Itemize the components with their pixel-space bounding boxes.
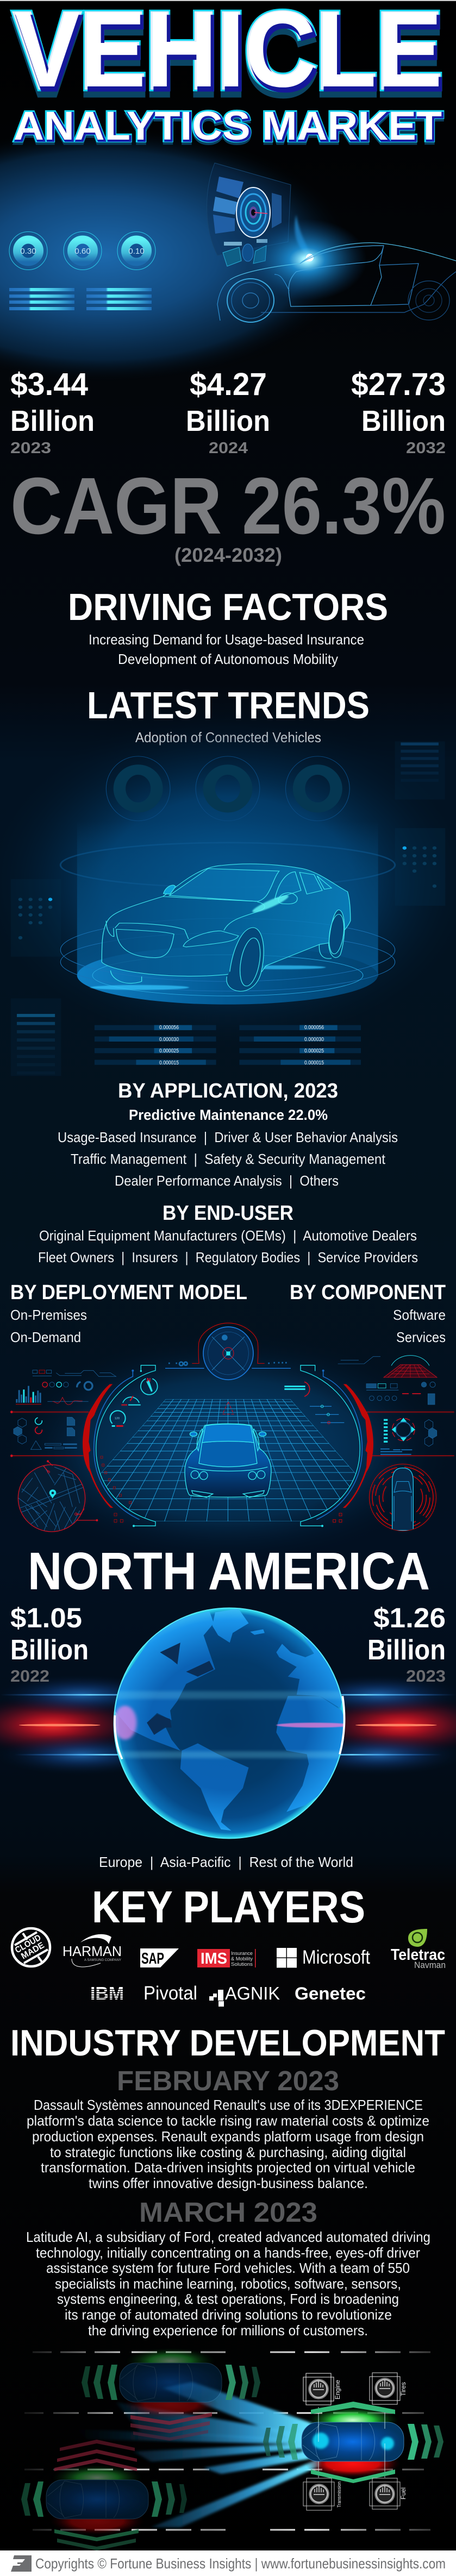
driving factors: DRIVING FACTORS — [68, 586, 388, 628]
car sensor glows — [313, 2407, 394, 2478]
latest trends: Adoption of Connected Vehicles — [135, 729, 321, 745]
right info widgets — [284, 1356, 454, 1456]
driving factors — [68, 586, 388, 667]
title: ANALYTICS MARKET — [15, 104, 443, 149]
hud gauge: transmission — [303, 2478, 342, 2510]
car wireframe — [102, 864, 351, 991]
other regions: Europe | Asia-Pacific | Rest of the World — [99, 1854, 353, 1870]
north america value 2022: Billion — [10, 1634, 89, 1666]
logo: Genetec: Genetec — [295, 1984, 366, 2003]
title: ANALYTICS MARKET — [14, 104, 442, 149]
dial arcs right — [301, 1365, 373, 1527]
february 2023: Dassault Systèmes announced Renault's use of its 3DEXPERIENCE — [34, 2097, 423, 2113]
logo: IMS: Solutions — [231, 1961, 253, 1967]
gauge circle 0.30 — [9, 231, 47, 269]
north america value 2023: Billion — [367, 1634, 446, 1666]
hologram cylinder and disc — [60, 822, 395, 1005]
gauge circle 0.10 — [117, 231, 155, 269]
north america value 2023: 2023 — [406, 1666, 446, 1685]
march 2023: assistance system for future Ford vehicles. With a team of 550 — [46, 2260, 410, 2276]
side panel: dots right — [395, 828, 445, 906]
gauge circle 0.60: 0.60 — [74, 247, 91, 256]
driving factors: Development of Autonomous Mobility — [118, 651, 338, 667]
logo: IMS: & Mobility — [231, 1956, 253, 1962]
logo: Pivotal: Pivotal — [143, 1983, 197, 2004]
data bar values: 0.000056 — [159, 1025, 179, 1031]
side panel: top right lines — [395, 741, 445, 799]
map with location pin — [18, 1456, 132, 1532]
logo: Harman: A SAMSUNG COMPANY — [84, 1959, 121, 1962]
glow streaks — [0, 1674, 456, 1775]
north america value 2022: 2022 — [10, 1666, 49, 1685]
data bar values: 0.000025 — [159, 1048, 179, 1054]
hud gauge: engine — [303, 2373, 341, 2405]
by application: Traffic Management | Safety & Security Management — [71, 1151, 386, 1167]
vehicle outline — [217, 243, 456, 322]
bar chart — [10, 1386, 41, 1457]
market value 2024 — [186, 367, 270, 457]
dial arcs left — [83, 1365, 155, 1527]
globe with light streaks — [0, 1608, 456, 1838]
february 2023: twins offer innovative design-business balance. — [89, 2175, 368, 2191]
left car bottom — [46, 2465, 148, 2535]
latest trends: LATEST TRENDS — [87, 684, 370, 726]
by application: Dealer Performance Analysis | Others — [115, 1173, 339, 1189]
chevrons — [21, 2365, 443, 2550]
gauge circle 0.30: 0.30 — [20, 247, 36, 256]
hud gauge: engine: Engine — [334, 2380, 341, 2399]
by end-user: Original Equipment Manufacturers (OEMs) | Automotive Dealers — [39, 1227, 417, 1244]
title: ANALYTICS MARKET — [14, 106, 442, 152]
logo: Harman — [63, 1934, 122, 1967]
lane dashes — [24, 2352, 430, 2530]
faint gauge rings — [106, 756, 349, 821]
north america value 2023: $1.26 — [373, 1602, 446, 1633]
data bar values: 0.000056 — [304, 1025, 324, 1031]
logo: Harman: HARMAN — [63, 1943, 122, 1959]
logo: IMS: Insurance — [231, 1951, 253, 1957]
left car top — [120, 2348, 222, 2418]
market value 2023: $3.44 — [10, 367, 88, 402]
latest trends — [87, 684, 370, 745]
data bar values: 0.000025 — [304, 1048, 324, 1054]
dashboard illustration — [2, 1323, 454, 1565]
march 2023: its range of automated driving solutions to revolutionize — [65, 2307, 392, 2323]
market value 2024: 2024 — [209, 440, 248, 457]
warning triangle — [222, 1402, 234, 1414]
icon: speedometer hud — [207, 163, 291, 266]
north america value 2023 — [367, 1602, 446, 1685]
light beam and headlight glow — [247, 215, 367, 300]
data bar values: 0.000015 — [159, 1060, 179, 1066]
logo: SAP: SAP — [141, 1950, 164, 1967]
radar — [165, 1323, 291, 1380]
logo: Teletrac Navman: Teletrac — [391, 1946, 445, 1964]
by deployment model — [10, 1281, 247, 1345]
logo: Microsoft: Microsoft — [302, 1947, 370, 1968]
hud gauge: tires: Tires — [399, 2382, 407, 2396]
february 2023: production expenses. Renault expands platform usage from design — [32, 2128, 424, 2145]
by component: BY COMPONENT — [290, 1281, 446, 1304]
data bars with values — [95, 1025, 361, 1065]
by component — [290, 1281, 446, 1345]
logo: IBM: IBM — [90, 1983, 124, 2003]
hero illustration: dashboard and car — [0, 125, 456, 386]
compass and speed gauges: N — [147, 1377, 151, 1383]
globe body — [110, 1608, 352, 1838]
lens reflections — [114, 1691, 346, 1699]
icon: company logo — [11, 2555, 32, 2572]
february 2023: to strategic functions like costing & purchasing, aiding digital — [50, 2144, 406, 2160]
north america value 2022 — [10, 1602, 89, 1685]
by deployment model: BY DEPLOYMENT MODEL — [10, 1281, 247, 1304]
market value 2032: $27.73 — [351, 367, 446, 402]
march 2023: systems engineering, & test operations, Ford is broadening — [57, 2291, 399, 2307]
hud gauge: tires — [370, 2373, 407, 2404]
side panel: dots left — [11, 879, 61, 957]
title: ANALYTICS MARKET — [14, 103, 442, 148]
february 2023: platform's data science to tackle rising raw material costs & optimize — [27, 2113, 429, 2129]
side panel: lines lower left — [11, 998, 61, 1076]
february 2023: FEBRUARY 2023 — [117, 2065, 339, 2096]
logo: CloudMade: MADE — [20, 1941, 46, 1961]
market value 2032: Billion — [361, 405, 446, 437]
right top view car with sonar — [369, 1464, 436, 1531]
february 2023 — [27, 2065, 429, 2191]
data bar values: 0.000015 — [304, 1060, 324, 1066]
compass and speed gauges: 120 — [115, 1417, 120, 1420]
progress bars — [9, 288, 152, 310]
gauge circle 0.10: 0.10 — [128, 247, 145, 256]
gauge circle 0.60 — [64, 231, 102, 269]
compass and speed gauges — [110, 1377, 158, 1427]
data bar values: 0.000030 — [304, 1037, 324, 1043]
driving factors: Increasing Demand for Usage-based Insurance — [89, 631, 364, 648]
logo: Agnik: AGNIK — [225, 1983, 280, 2003]
by deployment model: On-Premises — [10, 1307, 87, 1323]
by application: BY APPLICATION, 2023 — [118, 1080, 338, 1102]
market value 2023: 2023 — [10, 440, 51, 457]
market value 2023 — [10, 367, 95, 457]
market value 2024: $4.27 — [190, 367, 267, 402]
footer bar — [0, 2550, 456, 2576]
cagr: (2024-2032) — [174, 544, 282, 566]
by end-user: BY END-USER — [163, 1202, 293, 1225]
rear view sports car — [185, 1424, 271, 1497]
by application — [58, 1080, 398, 1189]
march 2023: specialists in machine learning, robotics, software, sensors, — [55, 2276, 401, 2292]
logo: Microsoft — [277, 1947, 370, 1968]
hud gauge: fuel — [370, 2478, 407, 2509]
north america value 2022: $1.05 — [10, 1602, 82, 1633]
floor grid — [101, 1399, 355, 1521]
by component: Software — [393, 1307, 446, 1323]
by end-user — [38, 1202, 418, 1265]
by end-user: Fleet Owners | Insurers | Regulatory Bodies | Service Providers — [38, 1249, 418, 1265]
logo: CloudMade — [12, 1928, 50, 1966]
logo: IMS — [197, 1949, 255, 1967]
market value 2024: Billion — [186, 405, 270, 437]
by deployment model: On-Demand — [10, 1329, 81, 1345]
hud gauge: transmission: Transmission — [336, 2481, 342, 2508]
by component: Services — [396, 1329, 446, 1345]
logo: CloudMade: CLOUD — [14, 1933, 43, 1955]
continents — [110, 1609, 349, 1831]
headlight beams — [76, 2382, 320, 2527]
data bar values: 0.000030 — [159, 1037, 179, 1043]
data bar values — [159, 1025, 324, 1066]
main car — [302, 2407, 404, 2478]
march 2023: Latitude AI, a subsidiary of Ford, created advanced automated driving — [26, 2229, 430, 2245]
autonomous road scene — [21, 2348, 443, 2550]
logo: Agnik — [209, 1983, 280, 2007]
march 2023: the driving experience for millions of customers. — [88, 2322, 368, 2339]
logo: IMS: IMS — [201, 1950, 227, 1967]
key players heading: KEY PLAYERS — [92, 1882, 365, 1932]
left info widgets — [11, 1370, 116, 1456]
by application: Predictive Maintenance 22.0% — [129, 1107, 328, 1123]
hud gauge: fuel: Fuel — [399, 2487, 407, 2499]
market value 2032: 2032 — [406, 440, 446, 457]
march 2023: technology, initially concentrating on a hands-free, eyes-off driver — [36, 2245, 420, 2261]
logo: Teletrac Navman: Navman — [414, 1960, 446, 1970]
march 2023 — [26, 2197, 430, 2339]
logo: Teletrac Navman — [391, 1929, 446, 1970]
door highlight — [251, 893, 290, 915]
march 2023: MARCH 2023 — [139, 2197, 317, 2228]
february 2023: transformation. Data-driven insights projected on virtual vehicle — [41, 2159, 415, 2176]
market value 2032 — [351, 367, 446, 457]
connected car hologram — [0, 712, 456, 1076]
market value 2023: Billion — [10, 405, 95, 437]
by application: Usage-Based Insurance | Driver & User Behavior Analysis — [58, 1129, 398, 1145]
